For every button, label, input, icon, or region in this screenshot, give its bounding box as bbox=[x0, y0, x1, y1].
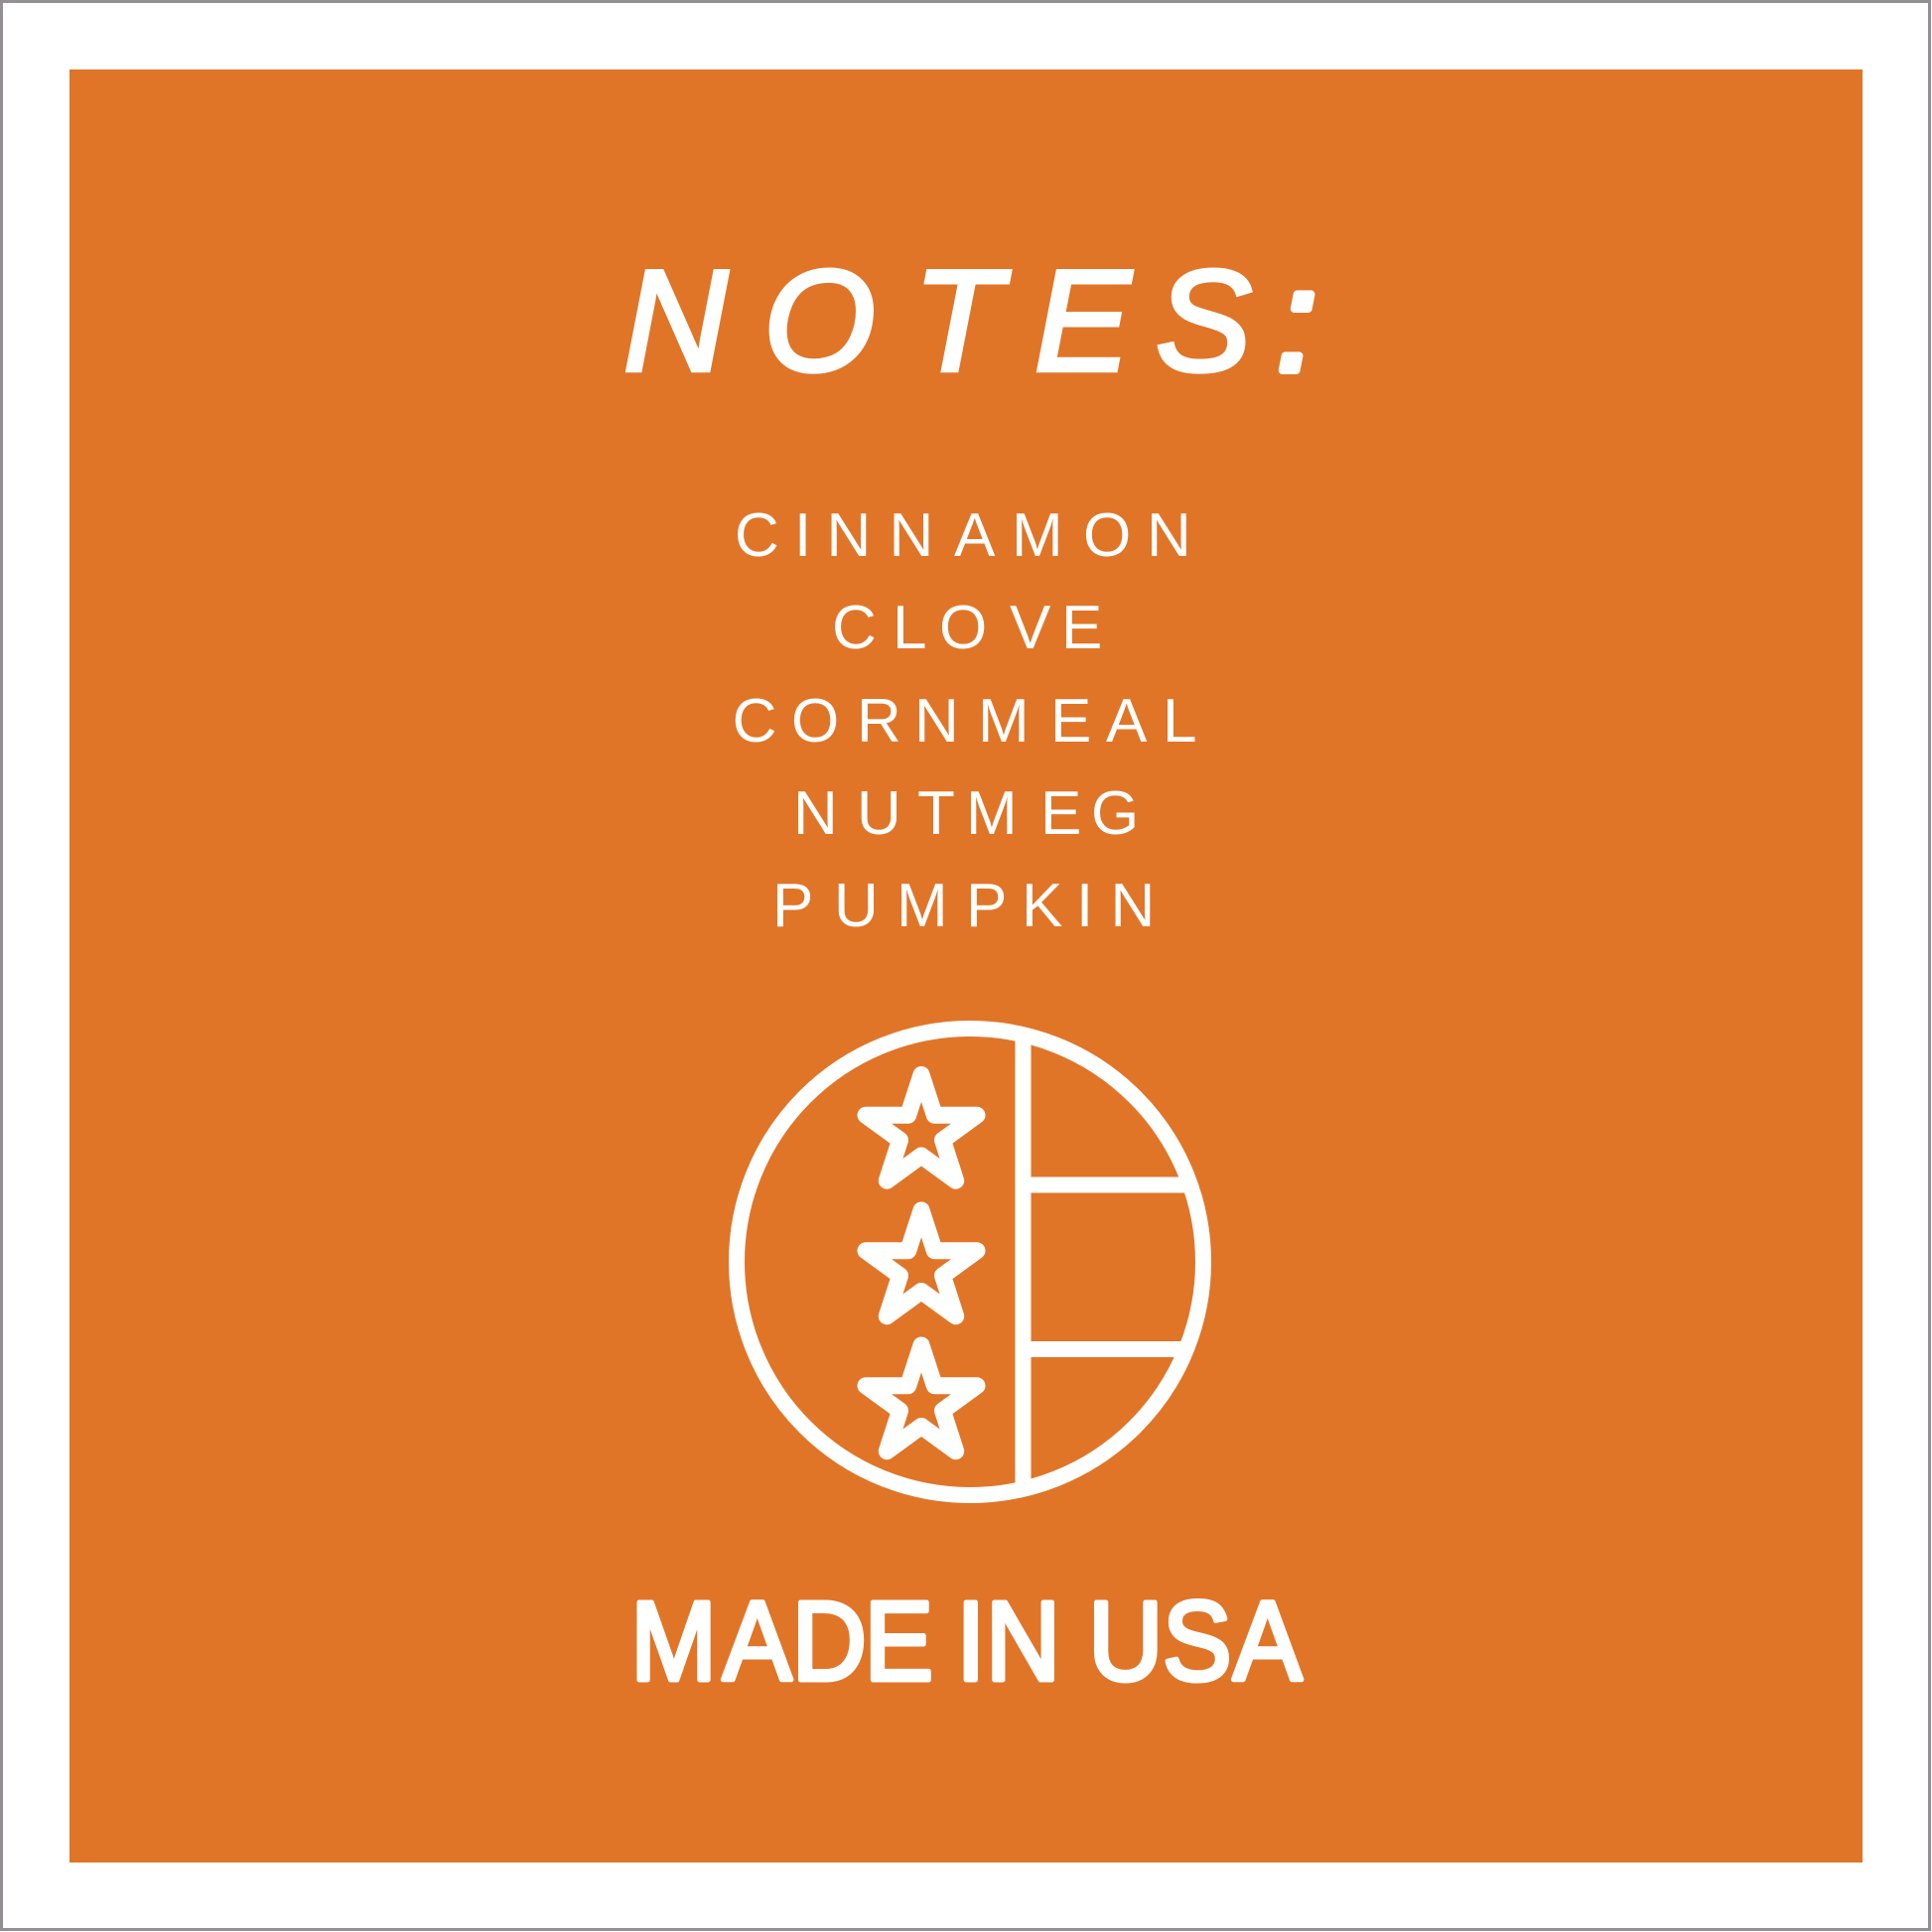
text block: notes list bbox=[733, 501, 1196, 940]
icon part: middle star bbox=[866, 1210, 977, 1316]
icon part: vertical divider bbox=[1015, 1035, 1031, 1489]
icon part: top star bbox=[866, 1074, 977, 1180]
caption: made in USA: MADE IN USA bbox=[630, 1580, 1303, 1705]
note: nutmeg: NUTMEG bbox=[793, 779, 1139, 848]
note: clove: CLOVE bbox=[832, 594, 1102, 662]
icon: USA flag globe bbox=[737, 1029, 1203, 1495]
note: pumpkin: PUMPKIN bbox=[772, 872, 1155, 940]
heading: notes: : bbox=[1277, 240, 1316, 401]
icon part: lower stripe bbox=[1023, 1341, 1186, 1357]
icon part: bottom star bbox=[866, 1345, 977, 1451]
icon part: upper stripe bbox=[1023, 1177, 1190, 1193]
icon part: circle outline bbox=[737, 1029, 1203, 1495]
note: cornmeal: CORNMEAL bbox=[733, 687, 1196, 756]
note: cinnamon: CINNAMON bbox=[735, 501, 1191, 570]
heading: notes: NOTES bbox=[623, 240, 1252, 401]
